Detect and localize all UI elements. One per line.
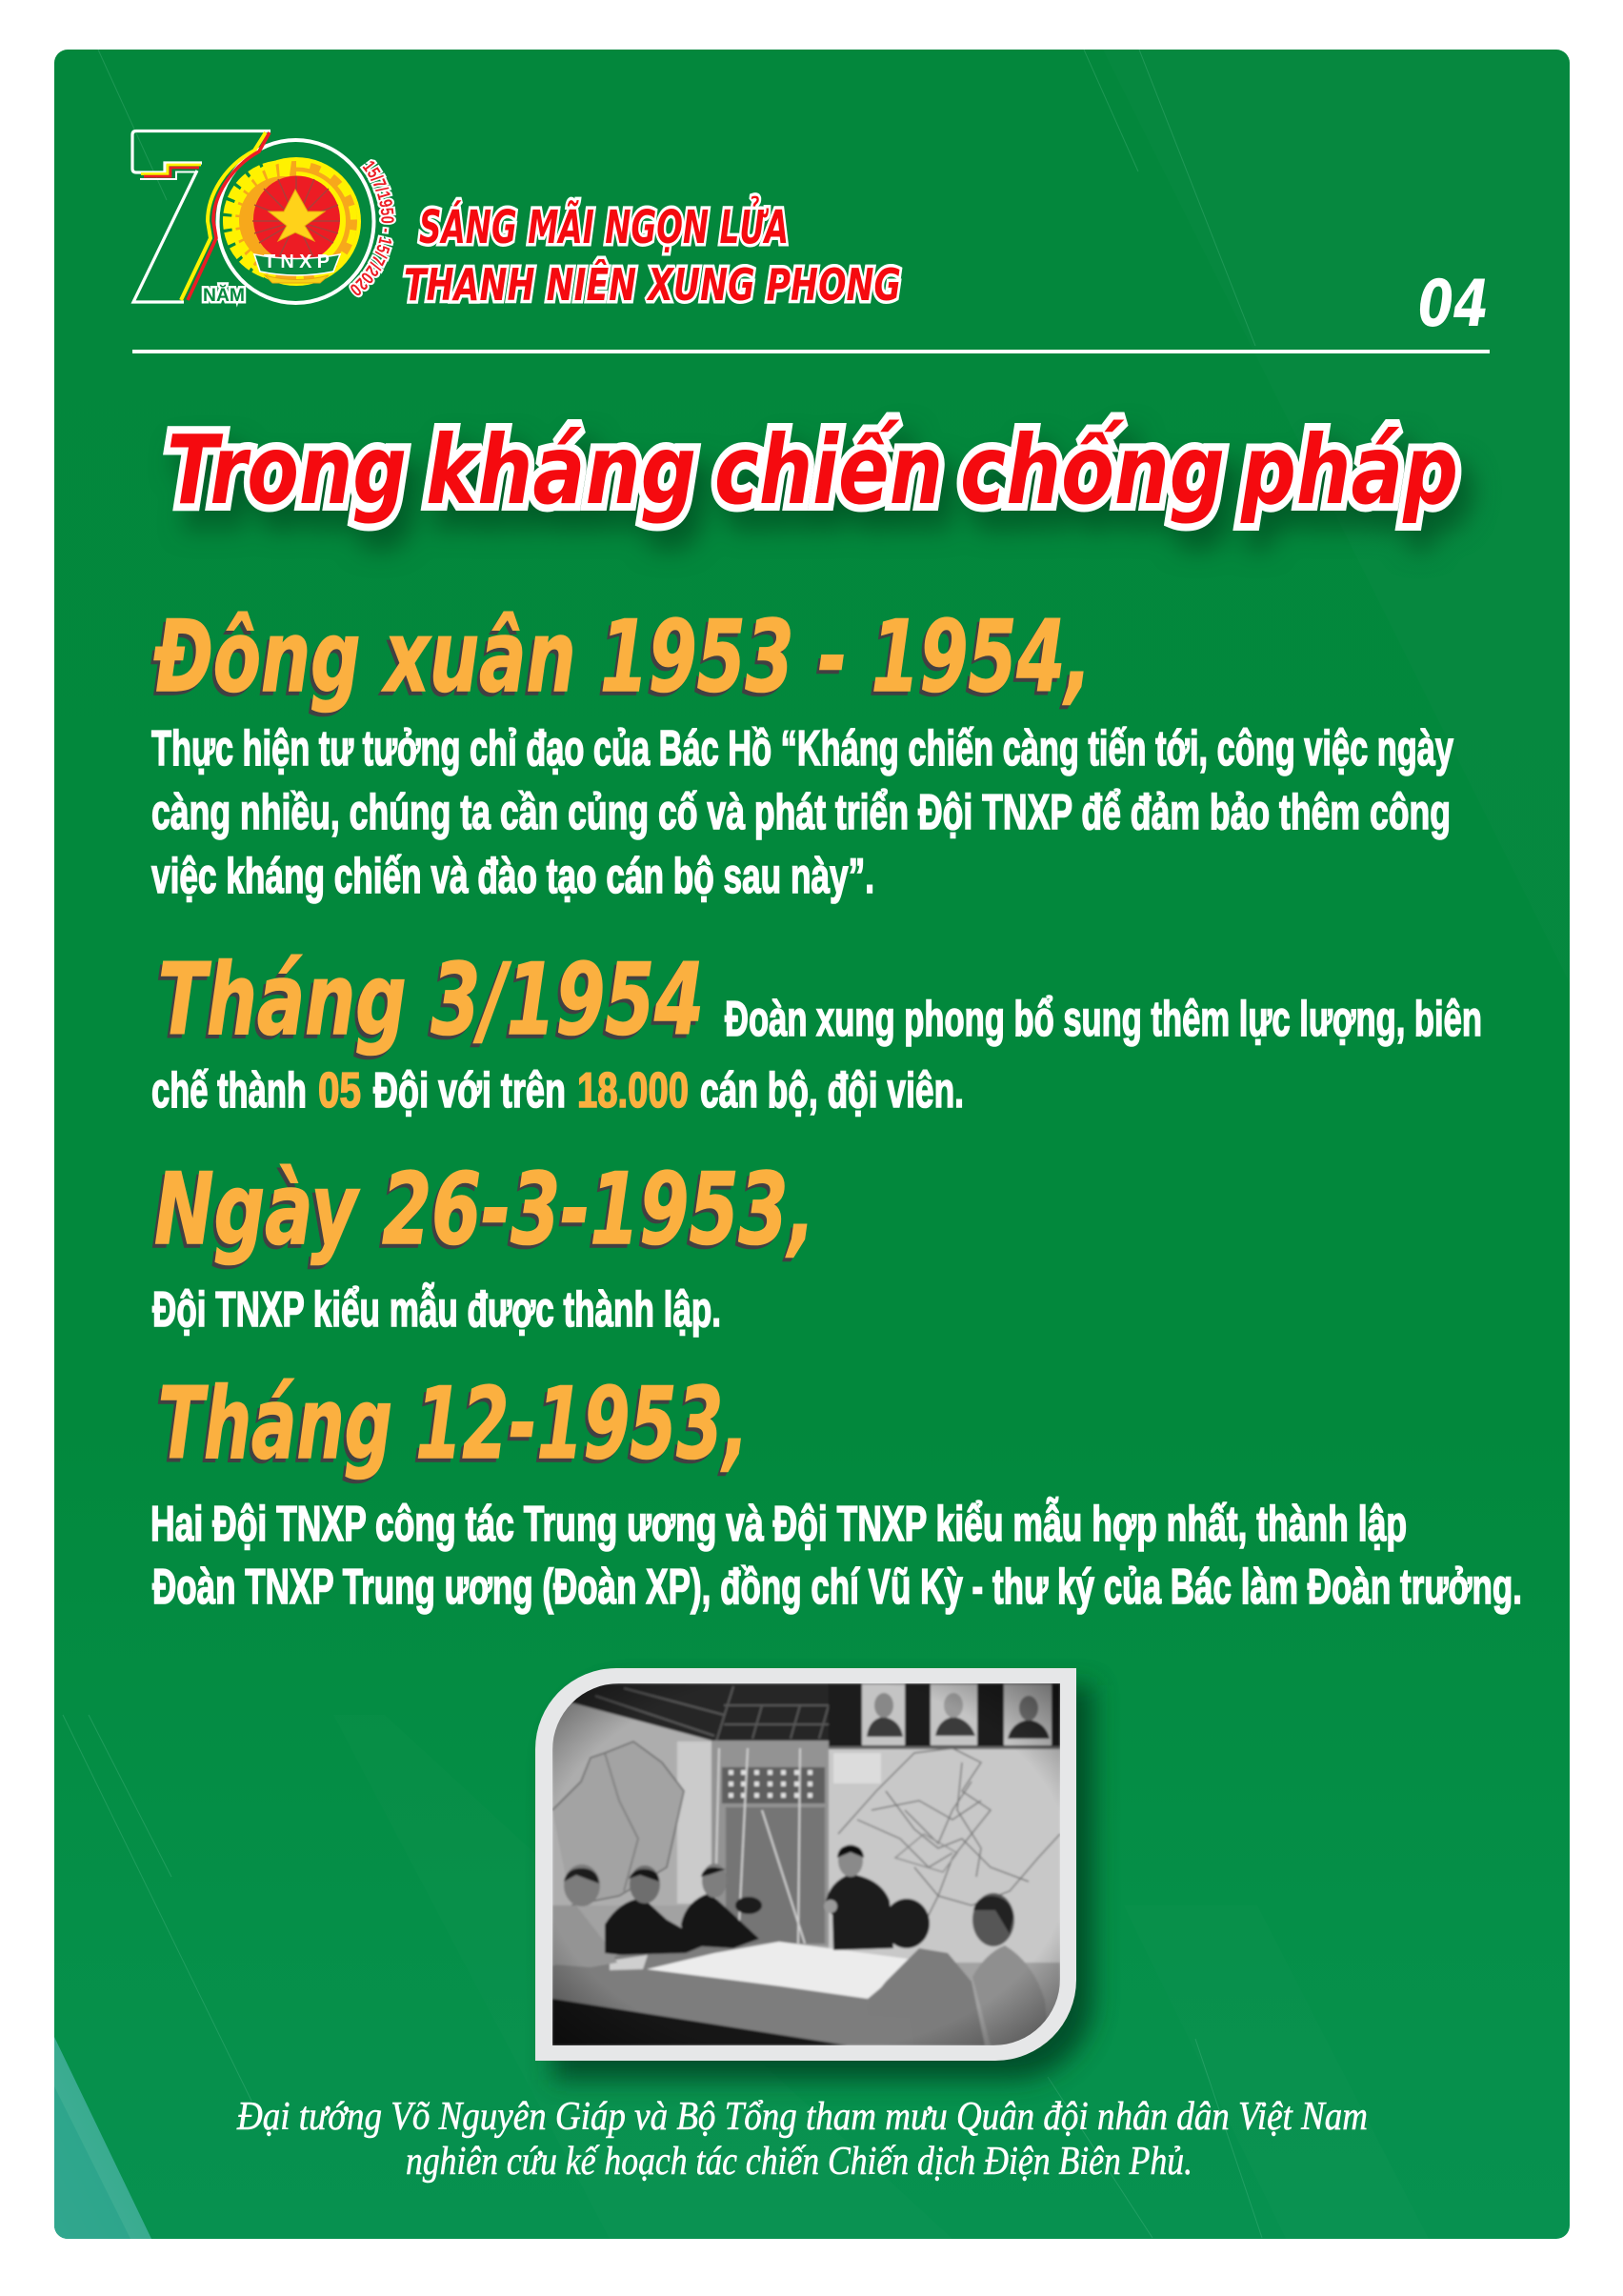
body text: chế thành [151,1063,307,1118]
body text [150,1497,1522,1615]
slogan [404,195,901,311]
table map [647,1942,914,1999]
section: Ngay 26-3-1953 [152,1153,815,1338]
body text: Đội TNXP kiểu mẫu được thành lập. [152,1282,721,1338]
person at right 2 [972,1893,1048,2045]
date arc: 15/7/1950 - 15/7/2020 [349,159,396,297]
slogan: SÁNG MÃI NGỌN LỬA [419,195,789,254]
table top [552,1943,914,2045]
body text: 05 [318,1063,361,1118]
section: Thang 3/1954 [151,943,1482,1118]
standing officer [824,1844,893,1950]
heading: Tháng 12-1953, [158,1367,749,1481]
photo frame [535,1668,1093,2080]
ring of zero [217,140,373,303]
star [269,190,325,241]
title: kháng [426,414,696,526]
body text [151,721,1453,904]
title [167,414,1458,526]
heading: Ngày 26-3-1953, [154,1153,815,1267]
label nam: NĂM [203,285,245,306]
page number: 04 [1418,267,1489,342]
title: Trong [167,414,407,526]
portraits [829,1683,1060,1747]
seated person 1 [552,1864,617,1967]
person at right 1 [881,1898,985,2045]
photo: meeting around map table [552,1683,1060,2045]
phone [735,1897,762,1914]
section: Thang 12-1953 [150,1367,1522,1615]
seated person 2 [605,1865,709,1955]
slogan: THANH NIÊN XUNG PHONG [404,259,901,311]
numeral 7 [132,131,270,302]
caption: nghiên cứu kế hoạch tác chiến Chiến dịch Điện Biên Phủ. [406,2140,1192,2184]
logo: 70 nam TNXP [130,130,396,307]
heading: Tháng 3/1954 [158,943,704,1057]
seated person 3 [681,1863,759,1948]
caption: Đại tướng Võ Nguyên Giáp và Bộ Tổng tham mưu Quân đội nhân dân Việt Nam [236,2095,1368,2139]
heading: Đông xuân 1953 - 1954, [153,600,1092,715]
wall map left [552,1703,714,1905]
title: chiến [714,414,943,526]
curtain [711,1741,829,1945]
emblem [230,157,361,286]
caption [236,2095,1368,2184]
wall map right [829,1748,1060,1963]
section: Dong xuan 1953-1954 [151,600,1453,904]
emblem: TNXP [264,252,330,272]
body text: cán bộ, đội viên. [700,1063,964,1118]
banner [254,254,340,275]
ceiling [571,1683,831,1742]
body text: Đội với trên [373,1063,566,1118]
title: chống [960,414,1225,526]
body text [151,992,1482,1118]
title: pháp [1240,414,1458,526]
bricks [265,275,329,283]
body text: 18.000 [577,1063,689,1118]
body text: việc kháng chiến và đào tạo cán bộ sau này”. [151,849,874,904]
